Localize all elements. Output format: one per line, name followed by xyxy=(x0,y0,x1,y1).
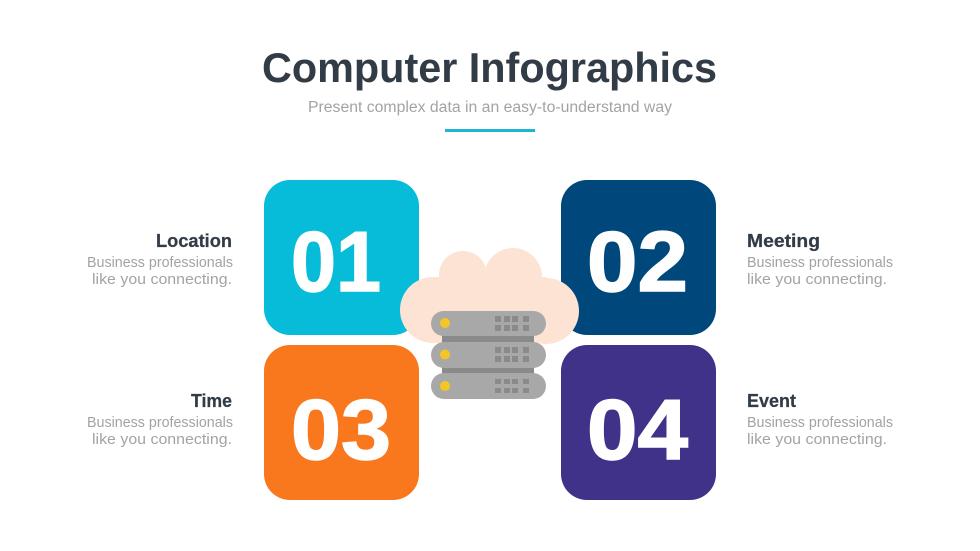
text block: Location: like you connecting. xyxy=(92,271,232,288)
text block: Event xyxy=(747,390,893,448)
text block: Time: like you connecting. xyxy=(92,431,232,448)
text block: Meeting xyxy=(747,230,893,288)
text block: Meeting: like you connecting. xyxy=(747,271,887,288)
text block: Meeting: Business professionals xyxy=(747,254,893,271)
icon: cloud xyxy=(400,248,579,344)
subtitle: Present complex data in an easy-to-understand way xyxy=(308,99,672,116)
text block: Location xyxy=(87,230,233,288)
number 01: 01 xyxy=(291,215,381,310)
number 02: 02 xyxy=(587,215,688,310)
panel: tile 03 xyxy=(264,345,419,500)
title: Computer Infographics xyxy=(262,44,717,91)
panel: tile 04 xyxy=(561,345,716,500)
text block: Event: Business professionals xyxy=(747,414,893,431)
text block: Time: Business professionals xyxy=(87,414,233,431)
panel: tile 01 xyxy=(264,180,419,335)
text block: Event: like you connecting. xyxy=(747,431,887,448)
number 04: 04 xyxy=(587,383,688,478)
text block: Time xyxy=(87,390,233,448)
title underline accent xyxy=(445,129,535,132)
text block: Location: Business professionals xyxy=(87,254,233,271)
panel: tile 02 xyxy=(561,180,716,335)
number 03: 03 xyxy=(291,383,391,478)
text block: Time: Time xyxy=(191,390,232,411)
text block: Event: Event xyxy=(747,390,796,411)
text block: Meeting: Meeting xyxy=(747,230,820,251)
icon: server stack xyxy=(431,311,546,399)
text block: Location: Location xyxy=(156,230,232,251)
